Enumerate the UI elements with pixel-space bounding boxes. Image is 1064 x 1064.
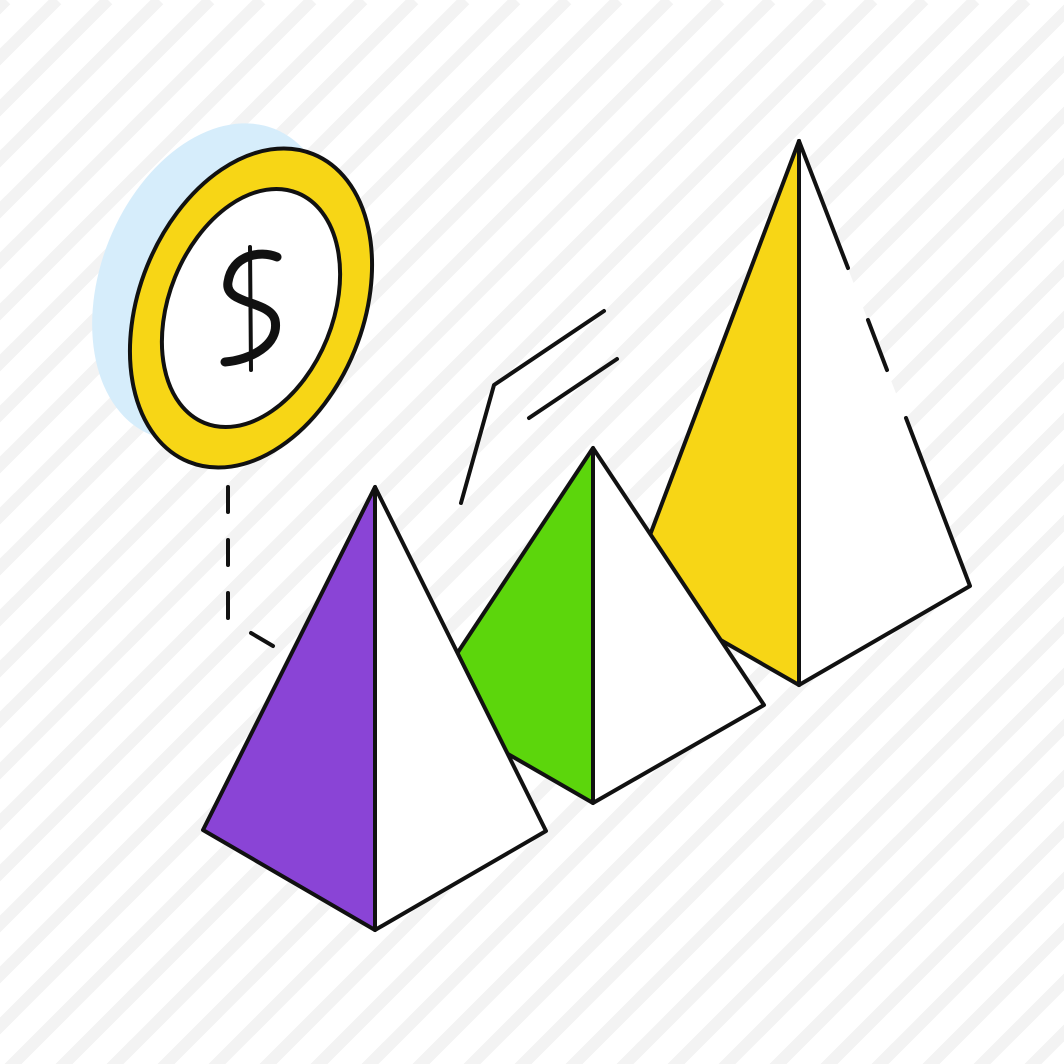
pyramid: purple — [203, 487, 546, 930]
pyramid: yellow — [630, 141, 970, 685]
pyramid: green — [423, 448, 764, 803]
dashed connector — [228, 487, 273, 646]
icon: coin — [47, 87, 417, 504]
icon: dollar sign — [225, 247, 277, 370]
trend lines — [461, 311, 617, 503]
